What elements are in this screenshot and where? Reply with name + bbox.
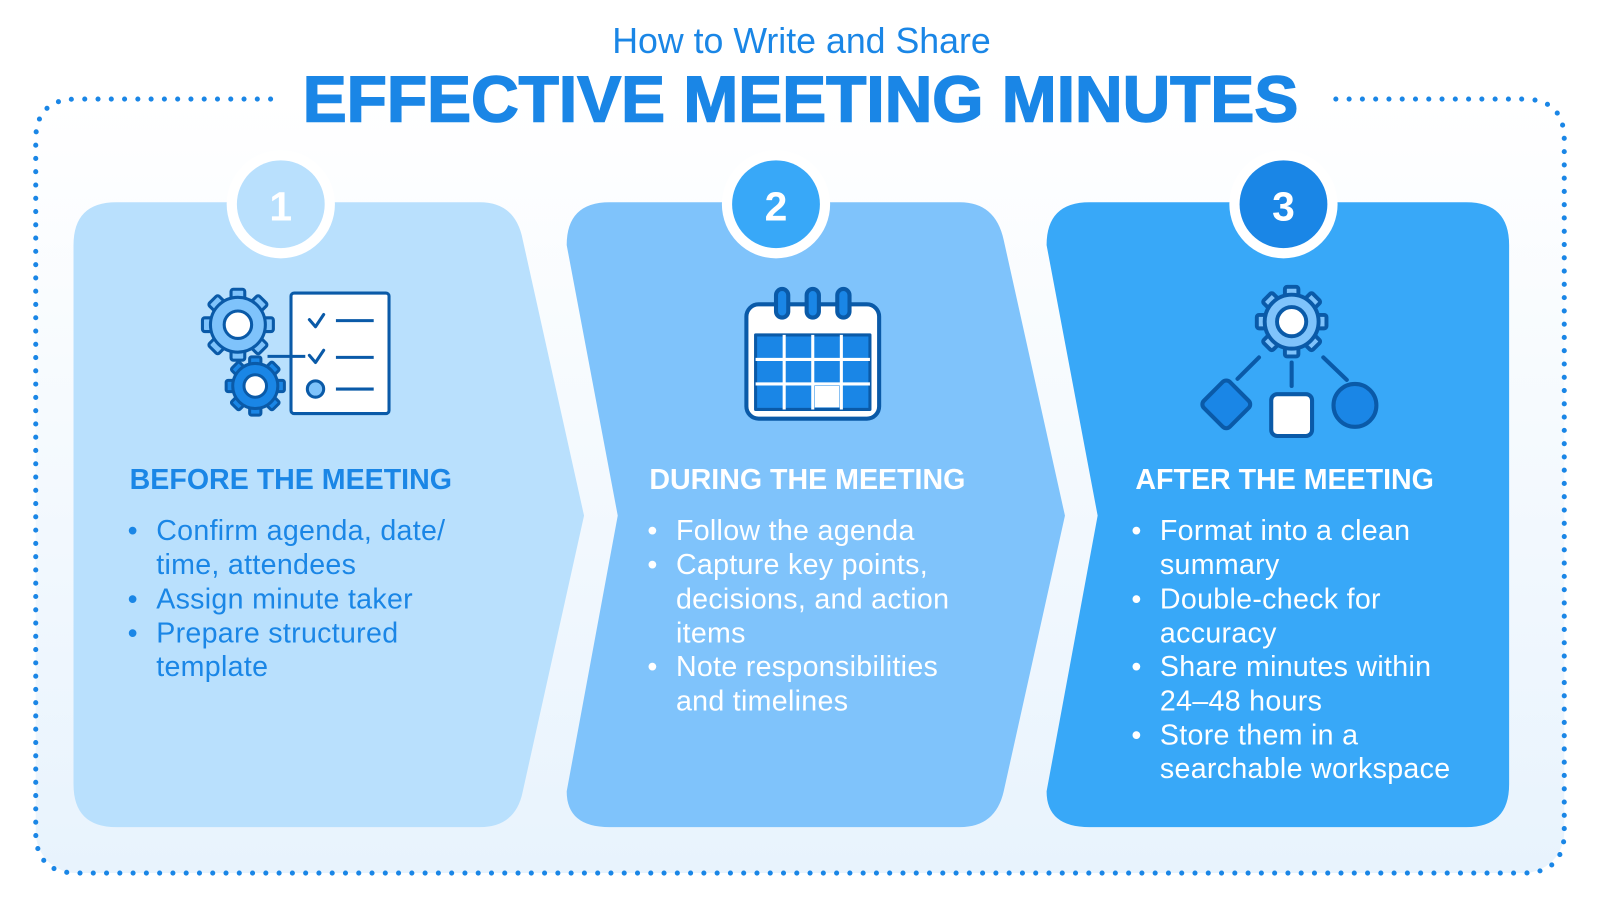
bullets: after: Store them in a [1160,719,1358,751]
bullets: during: and timelines [676,686,848,718]
panel: before the meeting [74,150,584,827]
number badge 1 [227,150,335,258]
icon: gears and checklist [202,289,389,415]
title: EFFECTIVE MEETING MINUTES [303,63,1298,136]
heading: after: AFTER THE MEETING [1135,464,1434,496]
bullets: after: searchable workspace [1160,753,1450,785]
bullets: during [647,515,949,718]
bullets: during: Note responsibilities [676,651,938,683]
bullets: after: accuracy [1160,617,1277,649]
number badge 3: 3 [1272,184,1295,230]
bullets: before: template [156,651,268,683]
bullets: after [1131,515,1450,785]
bullets: after: Double-check for [1160,584,1381,616]
bullets: during: Capture key points, [676,549,928,581]
bullets: before: • [128,515,138,547]
number badge 2 [722,150,830,258]
bullets: after: summary [1160,549,1280,581]
bullets: during: Follow the agenda [676,515,915,547]
number badge 2: 2 [765,184,787,230]
subtitle: How to Write and Share [612,21,991,61]
bullets: after: 24–48 hours [1160,686,1322,718]
icon: calendar [746,289,879,419]
bullets: before: • [128,584,138,616]
bullets: before: Confirm agenda, date/ [156,515,445,547]
panel: after the meeting [1047,150,1509,827]
bullets: during: • [647,549,658,581]
heading: during: DURING THE MEETING [649,464,965,496]
bullets: before: Prepare structured [156,617,398,649]
number badge 1: 1 [269,184,292,230]
heading: before: BEFORE THE MEETING [130,464,452,496]
bullets: after: • [1131,584,1142,616]
bullets: after: Format into a clean [1160,515,1410,547]
bullets: during: • [647,515,658,547]
bullets: after: • [1131,651,1142,683]
bullets: before: Assign minute taker [156,584,413,616]
bullets: before: time, attendees [156,549,356,581]
bullets: after: • [1131,515,1142,547]
number badge 3 [1229,150,1338,258]
bullets: before [128,515,445,683]
bullets: during: • [647,651,658,683]
panel: during the meeting [567,150,1065,827]
bullets: before: • [128,617,138,649]
bullets: after: Share minutes within [1160,651,1431,683]
bullets: after: • [1131,719,1142,751]
bullets: during: decisions, and action [676,584,949,616]
bullets: during: items [676,617,746,649]
icon: workflow [1200,287,1376,436]
